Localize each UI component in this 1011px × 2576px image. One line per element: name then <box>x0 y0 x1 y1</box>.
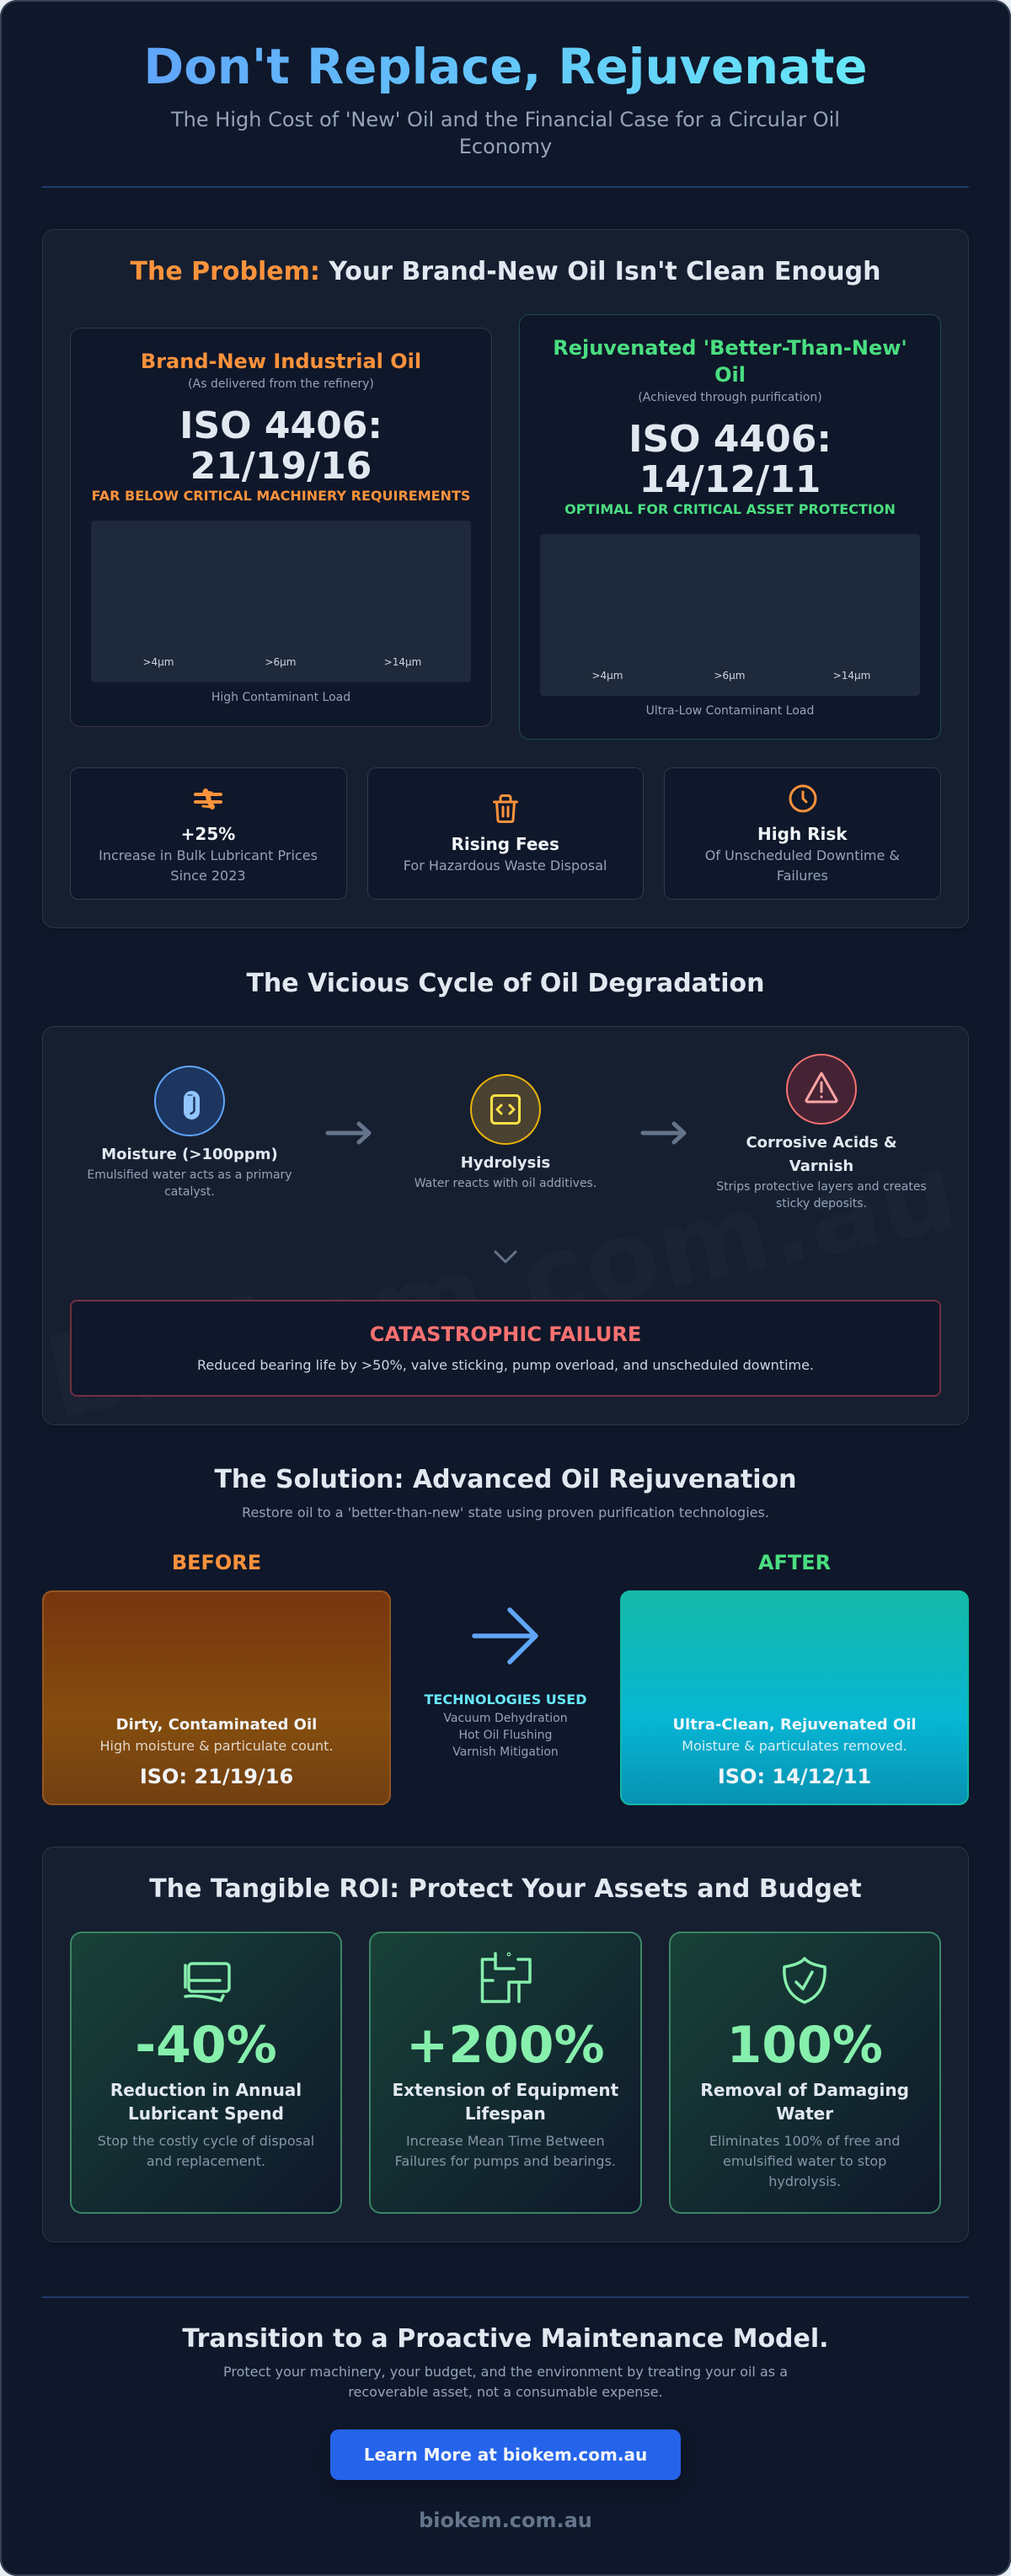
step description: Water reacts with oil additives. <box>415 1177 596 1190</box>
panel: ROI <box>42 1846 969 2242</box>
icon: book stack <box>184 1962 231 2002</box>
ROI value: 100% <box>726 2016 883 2075</box>
closing heading: Transition to a Proactive Maintenance Model. <box>182 2324 829 2354</box>
ROI label: Reduction in Annual <box>110 2080 302 2100</box>
chart: contaminant load: >6µm <box>714 670 745 681</box>
ISO code: 14/12/11 <box>639 458 821 501</box>
step: moisture <box>87 1066 292 1199</box>
card heading: Oil <box>714 363 746 387</box>
ROI description <box>709 2133 900 2189</box>
chart: contaminant load: >14µm <box>384 656 421 668</box>
step: corrosive acids <box>716 1054 927 1211</box>
footer brand: biokem.com.au <box>419 2509 592 2532</box>
panel: the problem <box>42 229 969 928</box>
technologies items <box>443 1712 568 1759</box>
step heading: Corrosive Acids & <box>746 1134 897 1152</box>
ROI label: Lifespan <box>465 2103 546 2124</box>
step description: catalyst. <box>164 1185 215 1199</box>
stat: downtime risk <box>664 767 941 900</box>
ROI description: Increase Mean Time Between <box>406 2133 605 2149</box>
stat description: Failures <box>777 868 828 884</box>
chart: contaminant load: >14µm <box>833 670 870 681</box>
oil ISO: ISO: 21/19/16 <box>140 1765 293 1788</box>
ROI description: Stop the costly cycle of disposal <box>98 2133 314 2149</box>
ROI description: and replacement. <box>147 2153 265 2169</box>
technologies heading: TECHNOLOGIES USED <box>424 1692 587 1708</box>
stat description: Since 2023 <box>170 868 246 884</box>
panel: clean oil <box>620 1590 969 1805</box>
closing text: Protect your machinery, your budget, and the environment by treating your oil as a <box>223 2364 788 2380</box>
stat description <box>705 847 900 884</box>
callout: catastrophic failure <box>70 1300 941 1397</box>
chart: contaminant load: >4µm <box>591 670 623 681</box>
card note: (Achieved through purification) <box>638 391 822 404</box>
step description <box>716 1180 927 1211</box>
arrow: moisture to hydrolysis <box>325 1122 371 1144</box>
arrow: chevron down <box>494 1250 517 1264</box>
technologies items: Varnish Mitigation <box>452 1745 559 1759</box>
ROI label <box>393 2080 618 2124</box>
ROI label: Extension of Equipment <box>393 2080 618 2100</box>
panel: dirty oil <box>42 1590 391 1805</box>
chart: contaminant load <box>91 521 471 682</box>
icon: shield check <box>783 1957 826 2004</box>
panel heading: the problem: The Problem: Your Brand-New Oil Isn't Clean Enough <box>130 257 881 286</box>
arrow: hydrolysis to acids <box>640 1122 686 1144</box>
status tag: OPTIMAL FOR CRITICAL ASSET PROTECTION <box>564 501 896 517</box>
ROI description <box>98 2133 314 2169</box>
step description: Strips protective layers and creates <box>716 1180 927 1194</box>
stat description: Increase in Bulk Lubricant Prices <box>99 847 318 863</box>
ISO code <box>629 418 832 501</box>
card: brand-new oil <box>70 328 492 727</box>
oil description: High moisture & particulate count. <box>99 1738 334 1754</box>
button: learn more <box>330 2429 681 2480</box>
card: rejuvenated oil <box>519 314 941 740</box>
subtitle: Economy <box>459 135 552 158</box>
stat value: High Risk <box>757 824 848 844</box>
icon: trash can <box>493 794 518 823</box>
button: learn more: Learn More at biokem.com.au <box>364 2445 647 2465</box>
icon: water drop <box>154 1066 225 1136</box>
ROI label: Water <box>776 2103 833 2124</box>
label: after: AFTER <box>758 1551 831 1574</box>
card note: (As delivered from the refinery) <box>188 377 374 391</box>
step heading: Varnish <box>789 1157 853 1175</box>
ROI description: hydrolysis. <box>768 2173 841 2189</box>
ROI label <box>700 2080 909 2124</box>
stat: lubricant prices <box>70 767 347 900</box>
chart caption: Ultra-Low Contaminant Load <box>646 704 814 718</box>
section heading: the solution: The Solution: Advanced Oil Rejuvenation <box>214 1465 797 1494</box>
ROI description: Eliminates 100% of free and <box>709 2133 900 2149</box>
panel heading: ROI: The Tangible ROI: Protect Your Assets and Budget <box>149 1874 862 1904</box>
stat description <box>99 847 318 884</box>
closing text: recoverable asset, not a consumable expense. <box>348 2384 663 2400</box>
icon: dollar <box>194 788 222 810</box>
title: Don't Replace, Rejuvenate <box>143 39 868 95</box>
card heading: Rejuvenated 'Better-Than-New' <box>553 336 907 360</box>
ISO code: ISO 4406: <box>179 404 382 447</box>
card heading: Brand-New Industrial Oil <box>141 350 421 373</box>
stat description: For Hazardous Waste Disposal <box>404 858 607 874</box>
step heading: Moisture (>100ppm) <box>101 1146 278 1163</box>
callout heading: CATASTROPHIC FAILURE <box>370 1323 641 1346</box>
ROI label: Lubricant Spend <box>128 2103 284 2124</box>
icon: code square <box>470 1074 541 1145</box>
step: hydrolysis <box>415 1074 596 1190</box>
oil description: Moisture & particulates removed. <box>682 1738 907 1754</box>
step heading: Hydrolysis <box>461 1154 550 1172</box>
step description: sticky deposits. <box>776 1197 867 1211</box>
chart caption: High Contaminant Load <box>211 691 350 704</box>
ROI value: +200% <box>406 2016 605 2075</box>
oil ISO: ISO: 14/12/11 <box>718 1765 871 1788</box>
ROI description <box>395 2133 616 2169</box>
subtitle: The High Cost of 'New' Oil and the Financial Case for a Circular Oil <box>171 108 840 131</box>
stat value: +25% <box>181 824 235 844</box>
status tag: FAR BELOW CRITICAL MACHINERY REQUIREMENTS <box>92 488 470 504</box>
stat: waste fees <box>367 767 644 900</box>
ISO code <box>179 404 382 488</box>
chart: contaminant load: >6µm <box>265 656 297 668</box>
ROI description: Failures for pumps and bearings. <box>395 2153 616 2169</box>
stat value: Rising Fees <box>451 834 559 854</box>
oil title: Ultra-Clean, Rejuvenated Oil <box>672 1716 917 1734</box>
ISO code: ISO 4406: <box>629 418 832 461</box>
ROI value: -40% <box>135 2016 277 2075</box>
ROI card: lubricant spend <box>70 1932 342 2214</box>
icon: clock <box>789 785 817 812</box>
arrow: before to after <box>472 1607 538 1665</box>
ROI label: Removal of Damaging <box>700 2080 909 2100</box>
oil title: Dirty, Contaminated Oil <box>116 1716 317 1734</box>
label: before: BEFORE <box>172 1551 261 1574</box>
ROI description: emulsified water to stop <box>723 2153 886 2169</box>
icon: machinery pipe <box>480 1952 532 2003</box>
subtitle <box>170 108 840 158</box>
technologies list <box>424 1692 587 1759</box>
ROI card: water removal <box>669 1932 941 2214</box>
ROI label <box>110 2080 302 2124</box>
step heading <box>746 1134 897 1175</box>
chart: contaminant load: >4µm <box>142 656 174 668</box>
ROI card: equipment lifespan <box>369 1932 642 2214</box>
chart: contaminant load <box>540 534 920 696</box>
callout text: Reduced bearing life by >50%, valve sticking, pump overload, and unscheduled downtime. <box>197 1357 814 1373</box>
stat description: Of Unscheduled Downtime & <box>705 847 900 863</box>
technologies items: Hot Oil Flushing <box>459 1729 552 1742</box>
step description <box>87 1168 292 1199</box>
section subheading: Restore oil to a 'better-than-new' state using proven purification technologies. <box>242 1504 769 1520</box>
technologies items: Vacuum Dehydration <box>443 1712 568 1725</box>
section heading: vicious cycle: The Vicious Cycle of Oil Degradation <box>246 969 765 998</box>
icon: warning triangle <box>786 1054 857 1125</box>
card heading <box>553 336 907 387</box>
step description: Emulsified water acts as a primary <box>87 1168 292 1182</box>
ISO code: 21/19/16 <box>190 445 372 488</box>
closing text <box>223 2364 788 2400</box>
